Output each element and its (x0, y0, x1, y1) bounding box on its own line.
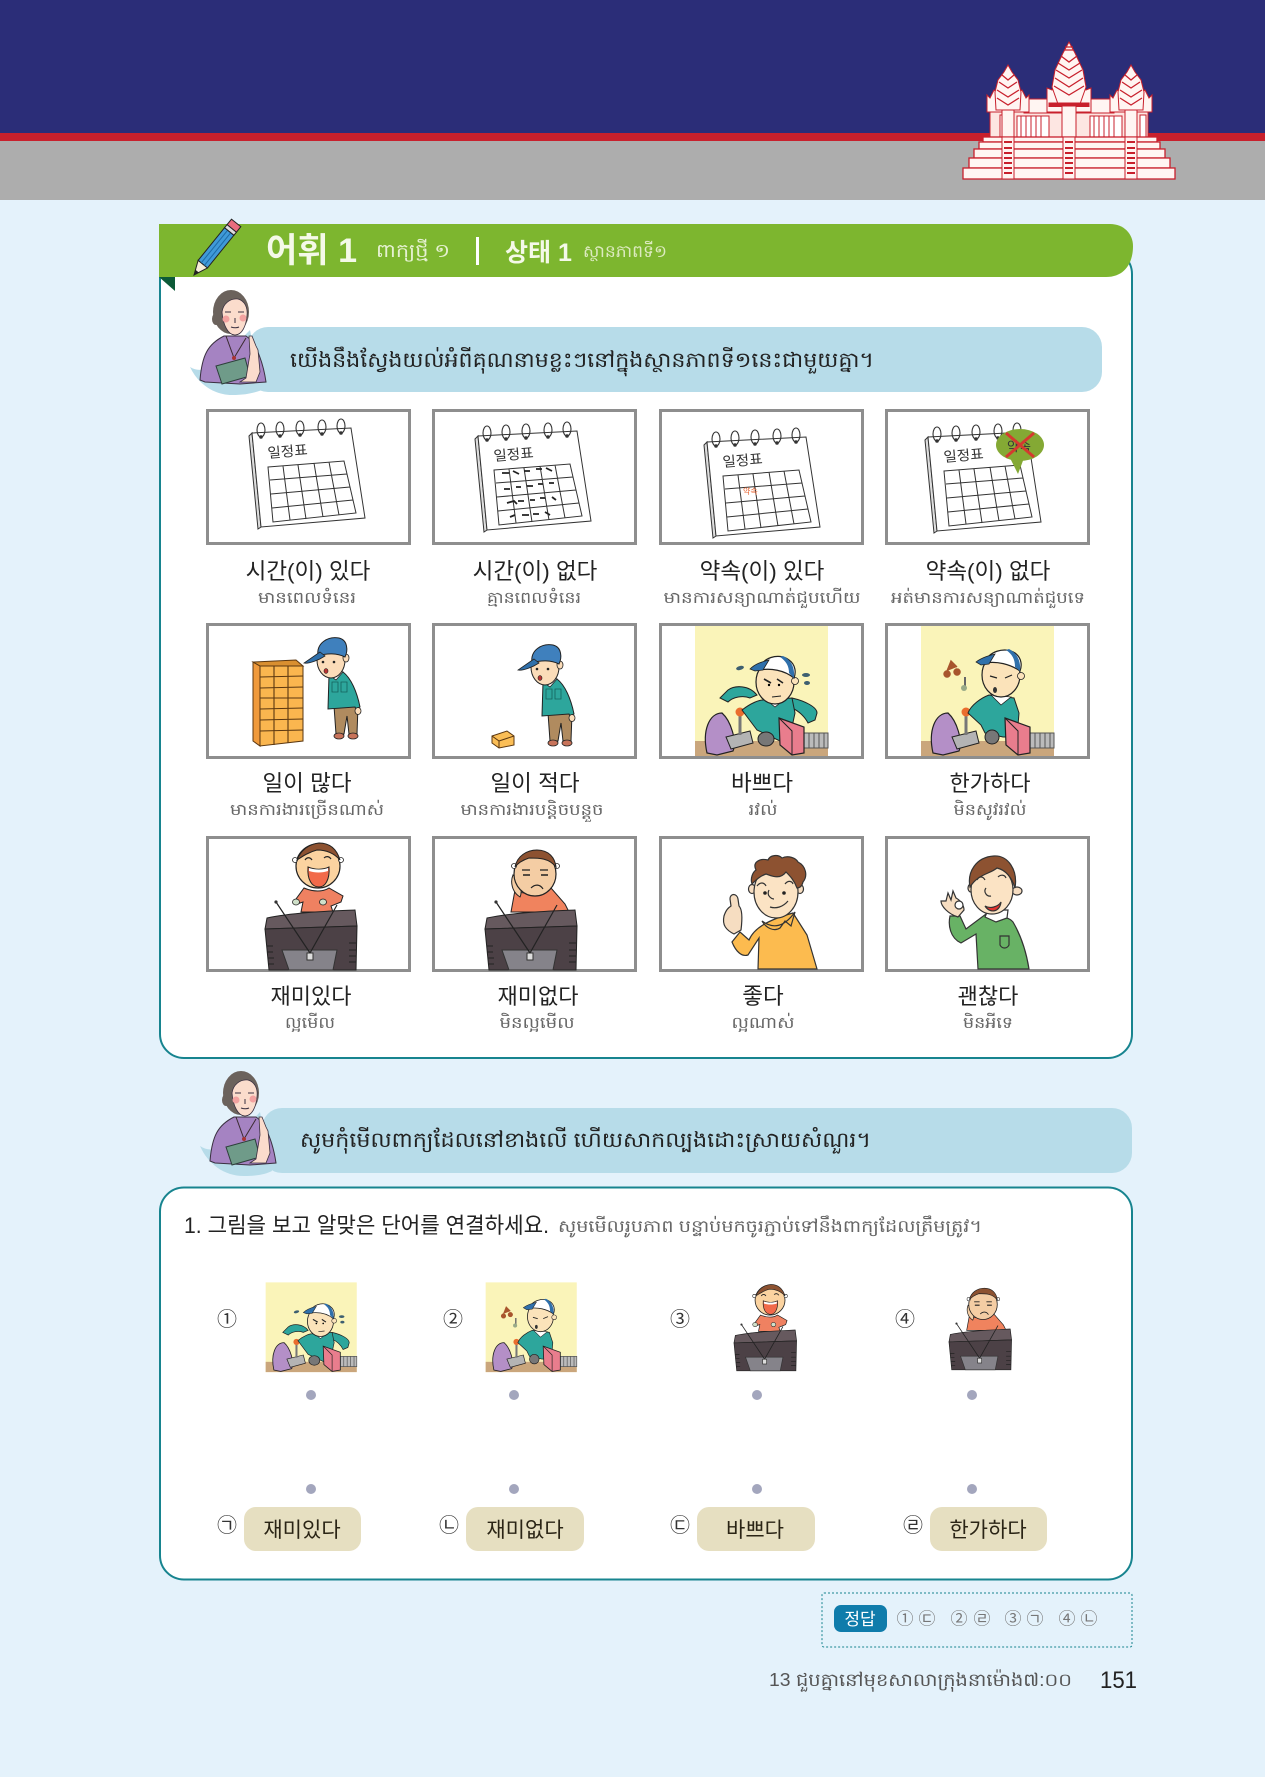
answers: ④ (1058, 1610, 1076, 1628)
speech bar with teacher (190, 290, 1102, 395)
answer box (822, 1593, 1132, 1647)
panel: vocabulary card (159, 219, 1133, 1058)
word options: 바쁘다 (726, 1519, 784, 1542)
item: busy (660, 624, 862, 819)
item: no appointment: 약속 (1007, 439, 1031, 454)
item: have time: 시간(이) 있다 (246, 559, 371, 584)
instruction text: យើងនឹងស្វែងយល់អំពីគុណនាមខ្លះៗនៅក្នុងស្ថានភាពទី១នេះជាមួយគ្នា។ (290, 346, 874, 377)
item: no appointment: 일정표 (943, 446, 984, 465)
item: not busy (886, 624, 1088, 821)
item: fun: ល្អមើល (285, 1012, 335, 1032)
item: busy: 바쁘다 (731, 771, 793, 796)
word options: ㉣ (903, 1514, 923, 1537)
question text: 1. 그림을 보고 알맞은 단어를 연결하세요. (184, 1213, 549, 1238)
item: have appointment: 약속 (743, 486, 758, 496)
picture options: ① (217, 1308, 237, 1331)
item: no appointment: អត់មានការសន្យាណាត់ជួបទេ (891, 587, 1085, 609)
item: not fun (434, 838, 636, 1032)
question translation: សូមមើលរូបភាព បន្ទាប់មកចូរភ្ជាប់ទៅនឹងពាក្យដែលត្រឹមត្រូវ។ (558, 1215, 982, 1238)
item: okay: 괜찮다 (958, 984, 1018, 1009)
top navy band (0, 0, 1265, 134)
item: good (660, 838, 862, 1032)
word options: 재미있다 (263, 1519, 341, 1542)
word options: ㉠ (217, 1514, 237, 1537)
item: no time: 일정표 (493, 445, 534, 464)
word options: ㉢ (670, 1514, 690, 1537)
item: busy: រវល់ (748, 799, 778, 819)
item: no appointment: 약속(이) 없다 (926, 559, 1051, 584)
item: no time: គ្មានពេលទំនេរ (487, 587, 581, 607)
answers: ㉠ (1026, 1610, 1044, 1628)
word options: ㉡ (439, 1514, 459, 1537)
picture options: ③ (670, 1308, 690, 1331)
item: fun (208, 838, 410, 1032)
subtitle: new words: ពាក្យថ្មី ១ (376, 238, 450, 262)
answer badge: 정답 (844, 1610, 876, 1629)
answers: ㉡ (1080, 1610, 1098, 1628)
item: not busy: 한가하다 (950, 771, 1030, 796)
title: state 1: 상태 1 (505, 239, 572, 267)
heading banner (159, 219, 1133, 291)
item: good: ល្អណាស់ (732, 1012, 794, 1032)
title: vocabulary 1: 어휘 1 (266, 232, 357, 270)
answer badge (834, 1605, 887, 1632)
divider bar (476, 237, 479, 265)
item: have time: 일정표 (267, 442, 308, 461)
subtitle: situation 1: ស្ថានភាពទី១ (583, 240, 667, 262)
speech bar 2 with teacher (200, 1071, 1132, 1176)
picture options (217, 1282, 1012, 1372)
item: not fun: 재미없다 (498, 984, 578, 1009)
item: a lot of work (208, 624, 410, 819)
word options: 재미없다 (486, 1519, 564, 1542)
item: have time (208, 410, 410, 607)
icon: Angkor Wat temple (963, 42, 1175, 179)
item: not fun: មិនល្អមើល (500, 1012, 574, 1032)
item: little work: មានការងារបន្តិចបន្តួច (460, 799, 604, 823)
answers: ㉢ (918, 1610, 936, 1628)
word options (217, 1507, 1047, 1551)
answers: ㉣ (974, 1610, 990, 1628)
item: no time: 시간(이) 없다 (473, 559, 598, 584)
page number: 151 (1100, 1667, 1137, 1694)
item: have time: មានពេលទំនេរ (258, 587, 356, 607)
item: have appointment: 약속(이) 있다 (700, 559, 825, 584)
footer lesson title: 13 ជួបគ្នានៅមុខសាលាក្រុងនាម៉ោង៧:០០ (769, 1669, 1072, 1692)
item: good: 좋다 (742, 984, 784, 1009)
gray band (0, 141, 1265, 200)
item: a lot of work: មានការងារច្រើនណាស់ (230, 799, 384, 819)
item: little work (434, 624, 636, 823)
connector dots (306, 1390, 977, 1494)
answers: ① (896, 1610, 914, 1628)
item: have appointment: 일정표 (722, 451, 763, 470)
item: fun: 재미있다 (271, 984, 351, 1009)
picture options: ④ (895, 1308, 915, 1331)
icon: teacher (210, 1071, 276, 1165)
word options: 한가하다 (949, 1519, 1027, 1542)
item: okay: មិនអីទេ (963, 1012, 1013, 1032)
item: no time (434, 410, 636, 607)
answers (896, 1610, 1098, 1628)
item: little work: 일이 적다 (490, 771, 580, 796)
red stripe (0, 133, 1265, 141)
item: have appointment: មានការសន្យាណាត់ជួបហើយ (664, 587, 860, 609)
item: no appointment (886, 410, 1088, 609)
item: have appointment (660, 410, 862, 609)
item: not busy: មិនសូវរវល់ (954, 799, 1026, 821)
icon: teacher (200, 290, 266, 384)
icon: pencil (189, 219, 241, 279)
panel: exercise card (160, 1188, 1132, 1580)
answers: ② (950, 1610, 968, 1628)
instruction text: សូមកុំមើលពាក្យដែលនៅខាងលើ ហើយសាកល្បងដោះស្រាយសំណួរ។ (300, 1127, 871, 1154)
answers: ③ (1004, 1610, 1022, 1628)
item: okay (886, 838, 1088, 1032)
item: a lot of work: 일이 많다 (262, 771, 352, 796)
picture options: ② (443, 1308, 463, 1331)
